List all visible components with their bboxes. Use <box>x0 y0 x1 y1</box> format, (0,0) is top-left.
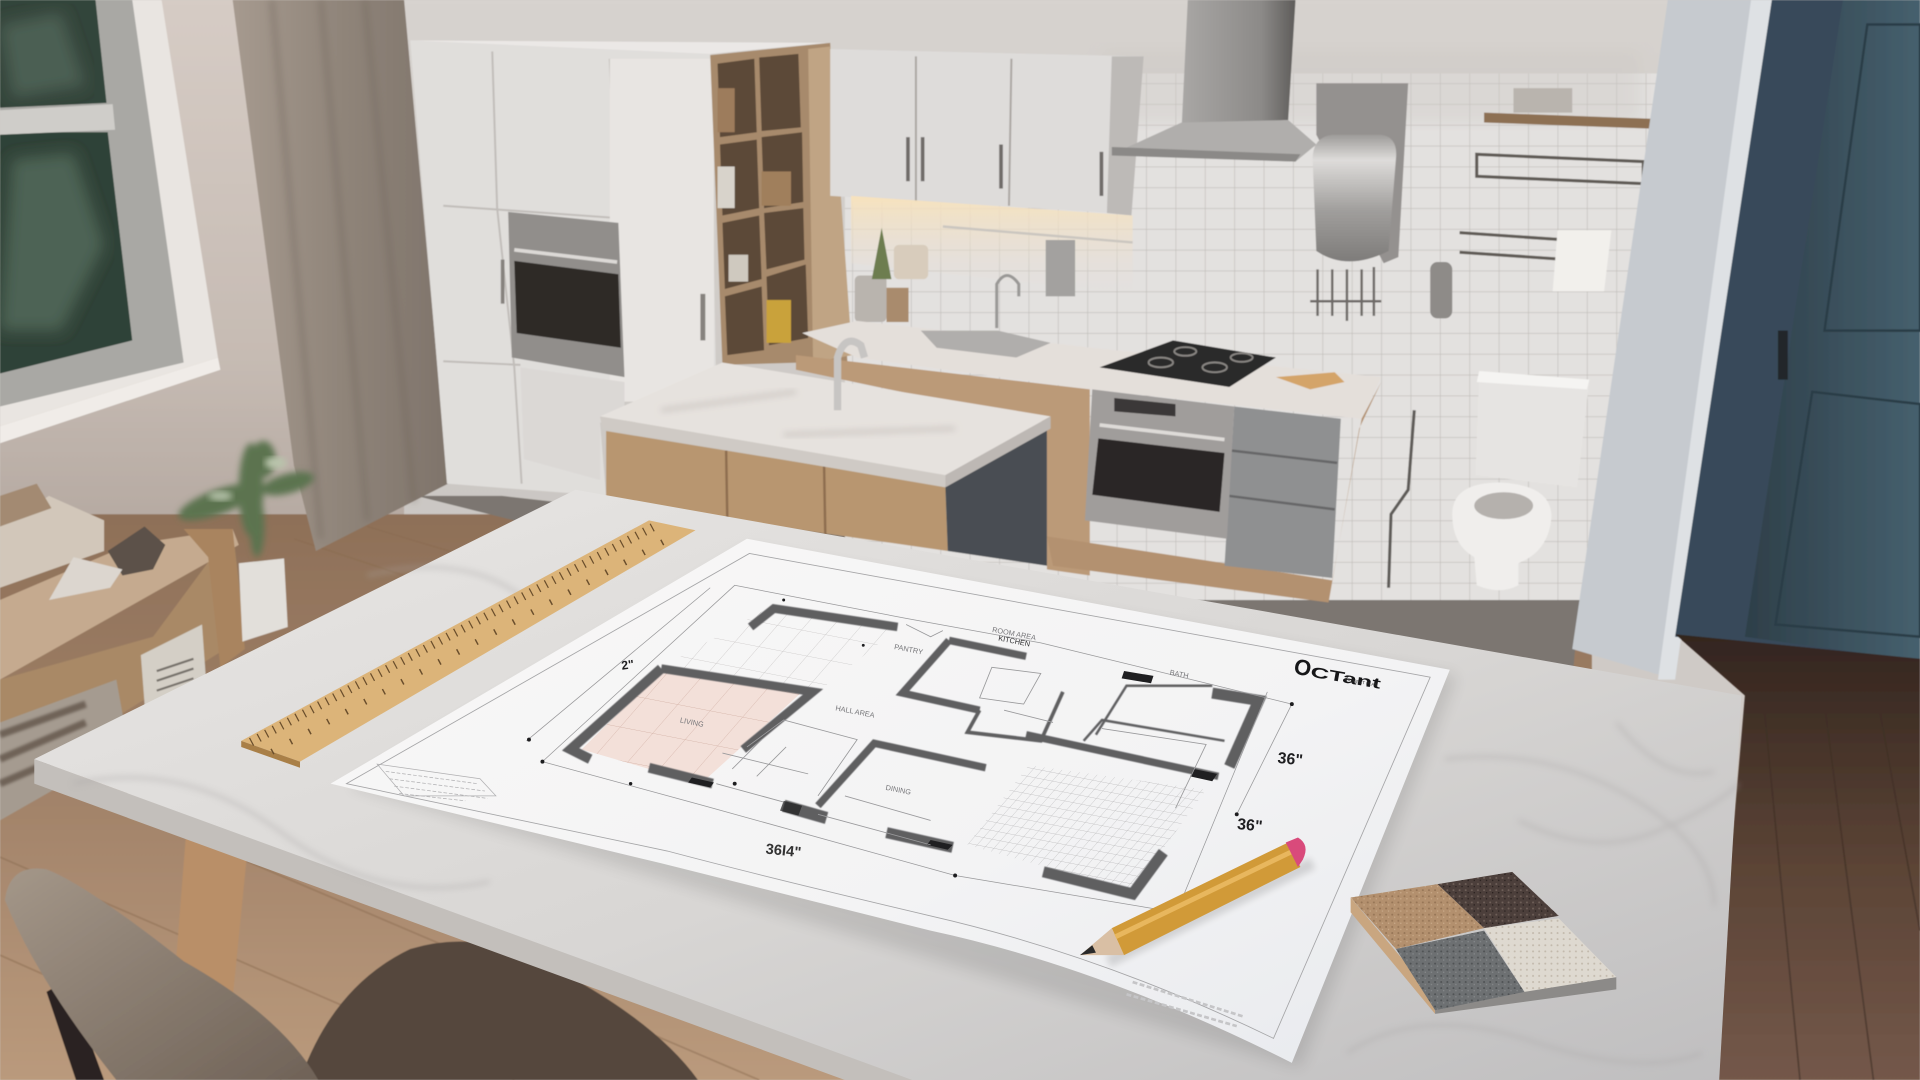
under-cabinet light glow <box>851 196 1133 294</box>
potted plant <box>175 441 316 642</box>
room labels: DINING <box>885 783 912 797</box>
wall-hung steel tray and utensils <box>1310 83 1408 321</box>
lower white drawers <box>520 367 624 480</box>
material samples <box>1351 872 1616 1014</box>
room: pink tiled room <box>582 671 802 778</box>
floor: left wood <box>0 514 1592 1080</box>
dimension labels <box>621 657 1304 861</box>
floor: back kitchen tiles <box>416 496 1580 667</box>
marble table top <box>34 490 1741 1080</box>
dimension labels: 36I4" <box>765 842 802 861</box>
window <box>0 0 220 443</box>
dimension labels: 36" <box>1236 816 1263 836</box>
counter cabinets <box>796 355 1381 602</box>
dark blue door <box>1675 0 1920 661</box>
table front edge <box>34 759 918 1080</box>
open wooden shelves <box>710 43 852 365</box>
kitchen counter with sink and hob <box>802 276 1381 419</box>
room: lower-right fine-grid room <box>967 765 1206 891</box>
pencil <box>1080 838 1313 961</box>
right dark wood floor <box>1675 634 1920 1080</box>
room labels: HALL AREA <box>835 703 875 720</box>
room labels: PANTRY <box>893 642 924 657</box>
upper wall cabinets <box>830 49 1144 216</box>
notes table <box>377 764 496 801</box>
island <box>600 341 1051 566</box>
soap dispenser <box>1430 262 1452 318</box>
logo subtitle: PROJECT PLAN <box>1344 677 1378 688</box>
range oven <box>1085 389 1234 539</box>
table legs <box>174 833 247 998</box>
sheet border <box>347 553 1430 1038</box>
partition wall <box>1572 0 1772 680</box>
plan walls <box>571 609 1259 894</box>
dimension labels: 36" <box>1277 750 1304 769</box>
hanging towel <box>1553 230 1611 291</box>
interior rooms linework <box>716 624 1206 845</box>
drain pipe <box>1389 410 1414 588</box>
room labels: ROOM AREA <box>991 625 1037 642</box>
back wall <box>404 0 1678 612</box>
wall shelf and rails <box>1460 88 1651 260</box>
logo: OCTant <box>1292 654 1384 694</box>
room labels: BATH <box>1169 668 1189 680</box>
blueprint sheet <box>331 539 1457 1068</box>
curtain <box>233 0 448 551</box>
dimension lines <box>527 585 1292 912</box>
ruler <box>241 520 696 768</box>
room labels: LIVING <box>679 716 705 729</box>
range hood <box>1112 0 1316 162</box>
room labels <box>679 625 1189 797</box>
kitchen wall rail, towel and appliance <box>855 227 1133 322</box>
wall accents <box>688 671 1217 850</box>
toilet <box>1452 371 1589 590</box>
tall white cabinets <box>410 40 827 496</box>
dimension ticks <box>527 599 1294 914</box>
room: upper-left tiled room <box>661 606 900 692</box>
dimension labels: 2" <box>621 657 635 673</box>
wall shading above tiles <box>1102 49 1641 122</box>
side shelving unit <box>0 484 245 820</box>
tiled backsplash wall <box>845 73 1659 600</box>
built-in oven <box>508 212 624 377</box>
title block notes <box>1127 982 1243 1026</box>
room labels: KITCHEN <box>998 634 1031 649</box>
chair <box>5 869 698 1080</box>
left room wall <box>0 0 422 551</box>
